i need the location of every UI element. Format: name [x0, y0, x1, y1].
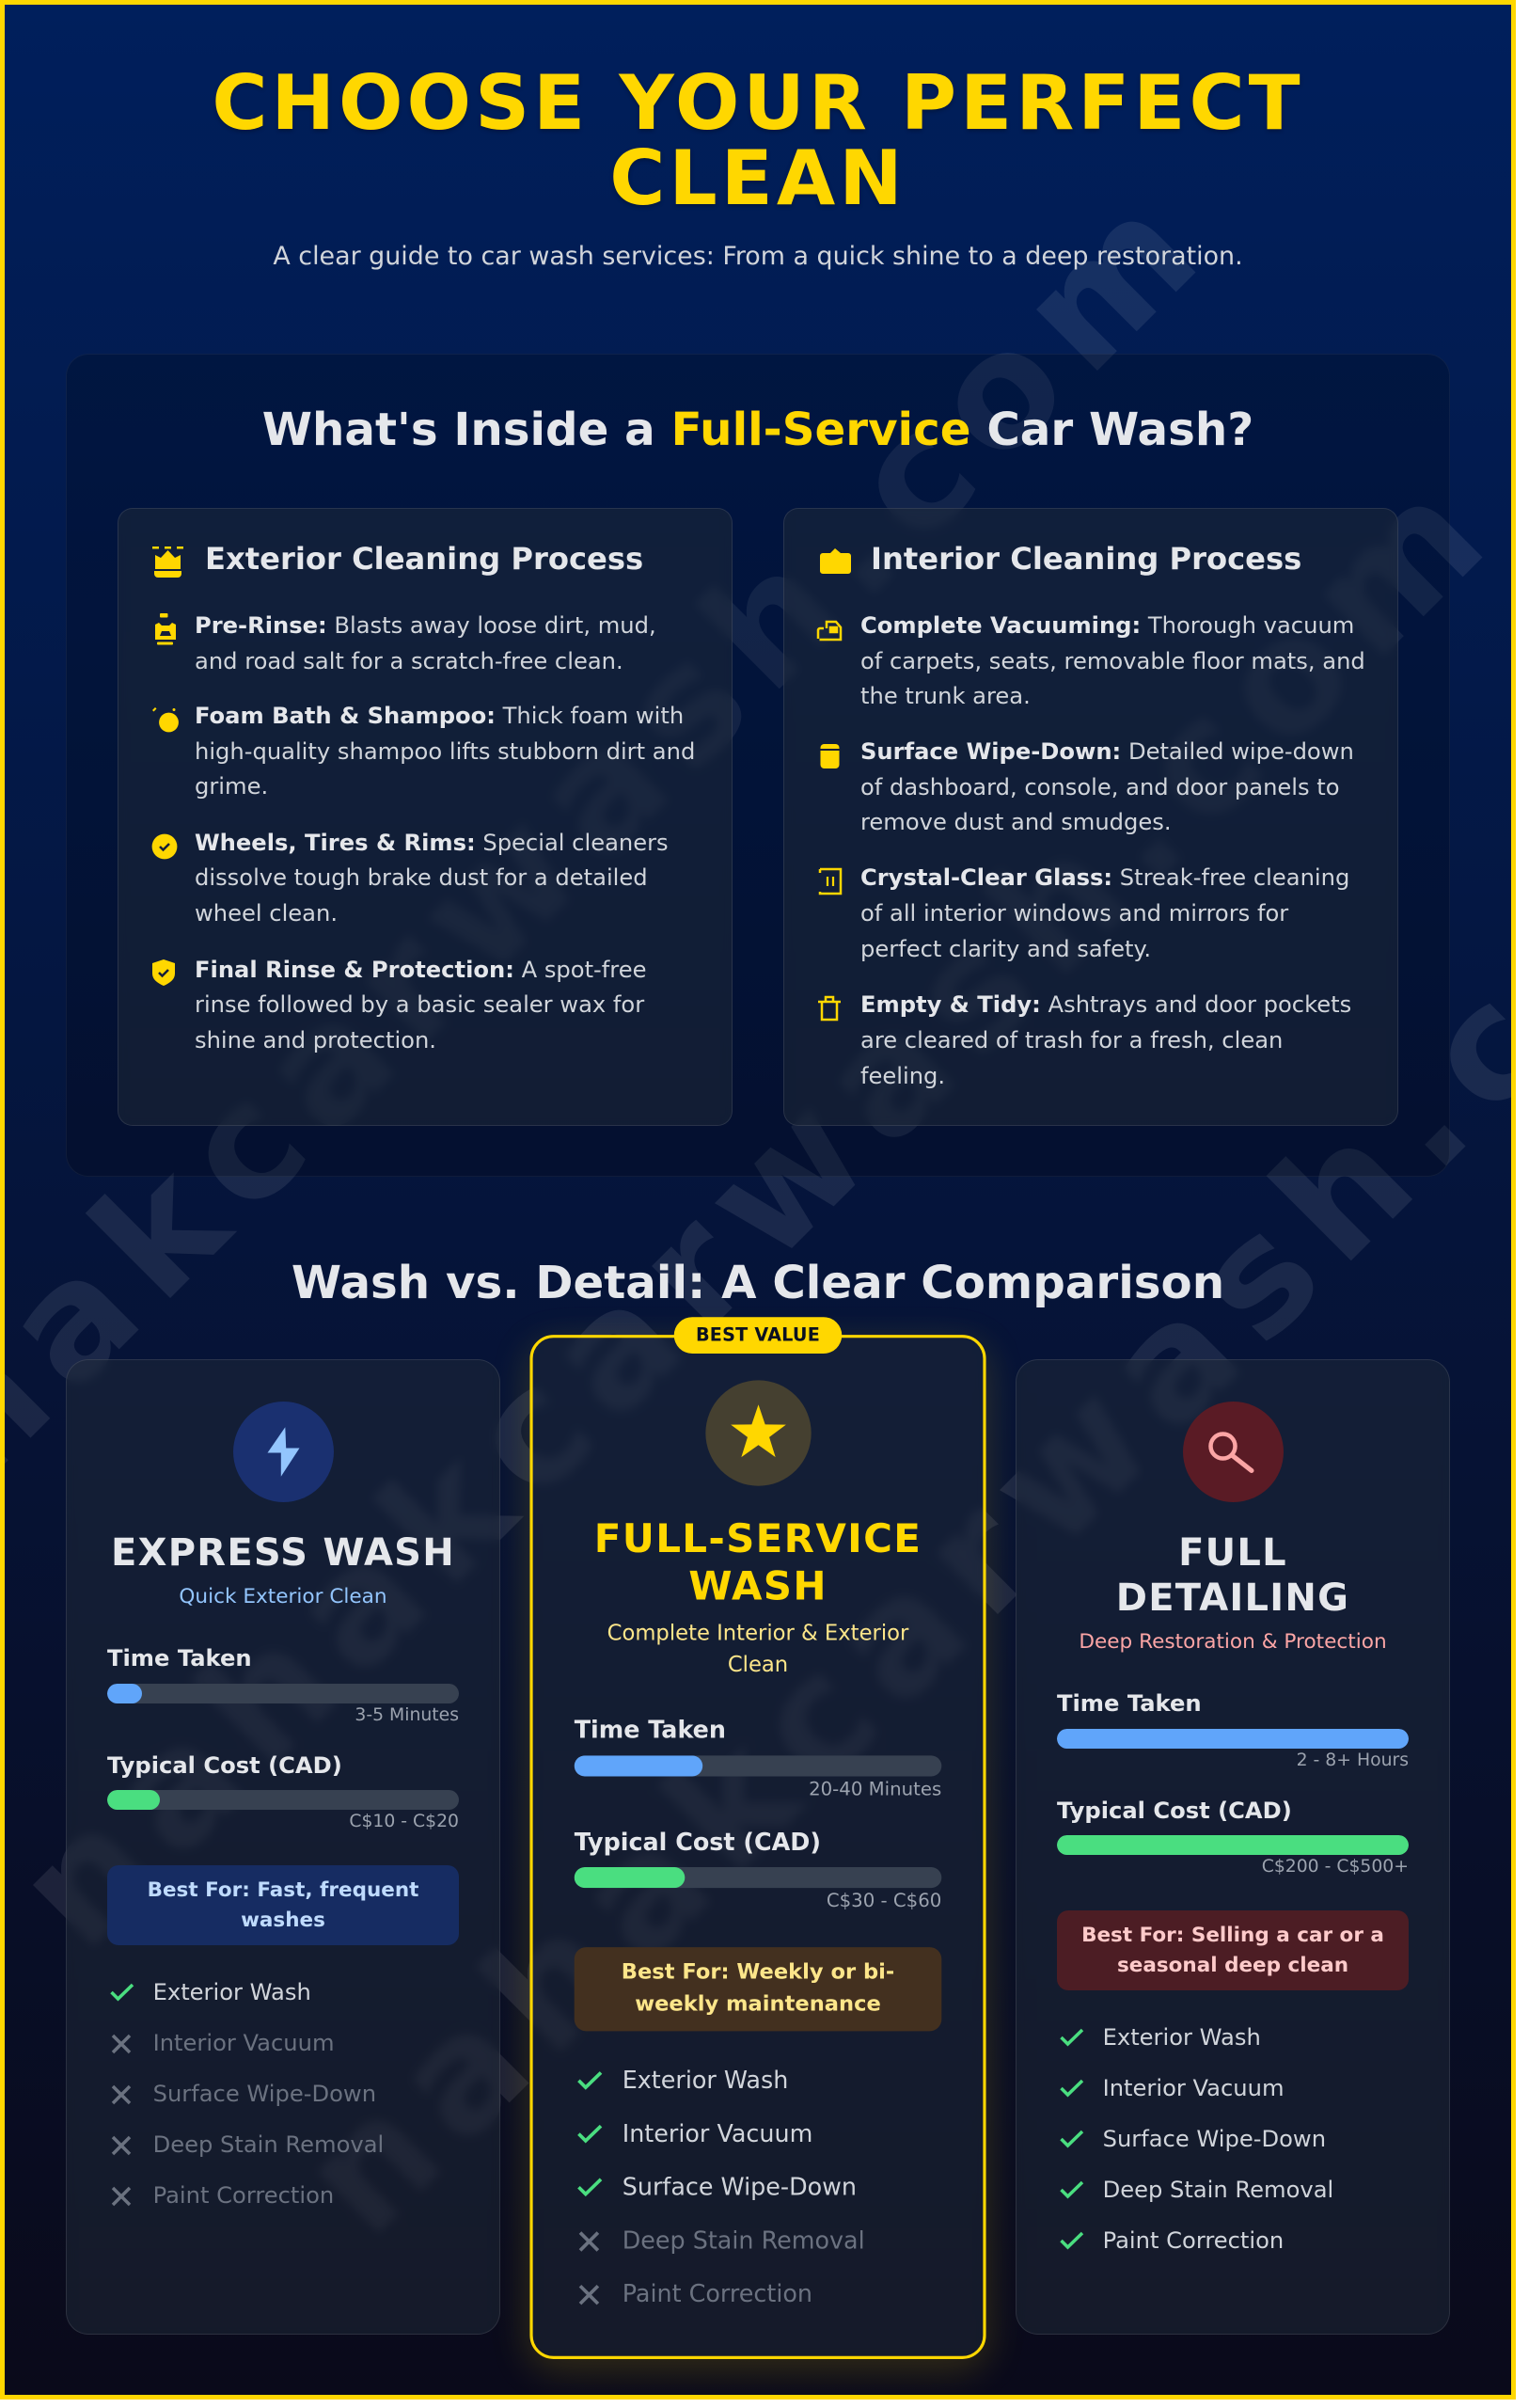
text: empty and tidy: are cleared of trash for a fresh, clean [860, 1027, 1283, 1054]
time meter: 3-5 Minutes [355, 1705, 459, 1725]
icon: foam [152, 707, 179, 732]
panel: exterior process [118, 508, 733, 1126]
card subtitle: Clean [728, 1653, 788, 1678]
subtitle: A clear guide to car wash services: From a quick shine to a deep restoration. [273, 241, 1243, 271]
text: wipe-down: remove dust and smudges. [860, 809, 1172, 835]
cost meter [107, 1752, 459, 1831]
text: foam bath [195, 703, 695, 800]
cost meter: C$10 - C$20 [349, 1812, 459, 1831]
text: pre-rinse: and road salt for a scratch-free clean. [195, 648, 623, 674]
text: foam bath: grime. [195, 773, 268, 800]
time meter: Time Taken [575, 1717, 726, 1744]
cost meter [574, 1829, 942, 1911]
card subtitle: Quick Exterior Clean [179, 1585, 387, 1608]
best value badge [674, 1317, 842, 1354]
feature list: Deep Stain Removal [153, 2131, 384, 2158]
feature list: Paint Correction [623, 2280, 812, 2308]
panel: express wash [66, 1359, 500, 2335]
card title [1116, 1531, 1349, 1620]
text: empty and tidy: feeling. [860, 1063, 945, 1089]
feature list: Exterior Wash [153, 1979, 311, 2005]
feature list: Interior Vacuum [623, 2120, 812, 2147]
text: foam bath: Foam Bath & Shampoo: Thick foam with [195, 703, 684, 729]
title: CLEAN [609, 135, 906, 223]
time meter [1057, 1690, 1409, 1770]
card subtitle [607, 1622, 908, 1678]
feature list: Deep Stain Removal [1103, 2177, 1333, 2203]
heading: exterior: Exterior Cleaning Process [205, 541, 643, 577]
feature list: Surface Wipe-Down [1103, 2126, 1326, 2152]
icon: pre-rinse [155, 613, 176, 645]
panel: full detailing [1016, 1359, 1450, 2335]
text: glass: Crystal-Clear Glass: Streak-free cleaning [860, 864, 1349, 891]
feature list [110, 1979, 384, 2209]
text: wheels: dissolve tough brake dust for a detailed [195, 864, 648, 891]
text: glass: of all interior windows and mirrors for [860, 900, 1288, 927]
time meter: Time Taken [107, 1645, 252, 1671]
best for callout [575, 1947, 941, 2031]
card title: FULL [1178, 1531, 1287, 1575]
best for callout: seasonal deep clean [1117, 1954, 1348, 1977]
time meter: 2 - 8+ Hours [1297, 1751, 1409, 1770]
text: wheels: Wheels, Tires & Rims: Special cleaners [195, 830, 669, 856]
best for callout: weekly maintenance [635, 1992, 881, 2017]
icon: glass [818, 867, 843, 895]
cost meter [1057, 1798, 1409, 1877]
icon: crown [152, 547, 183, 578]
icon: vacuum [816, 621, 843, 642]
text: vacuuming [860, 612, 1365, 709]
title [212, 59, 1304, 223]
cost meter: Typical Cost (CAD) [575, 1829, 821, 1857]
feature list: Interior Vacuum [1103, 2075, 1285, 2101]
icon: trash [818, 995, 841, 1022]
card subtitle: Deep Restoration & Protection [1079, 1630, 1387, 1654]
feature list: Surface Wipe-Down [623, 2173, 857, 2201]
text: pre-rinse [195, 612, 656, 674]
best for callout: Best For: Selling a car or a [1081, 1924, 1384, 1947]
text: wipe-down: of dashboard, console, and door panels to [860, 774, 1340, 800]
text: final rinse [195, 957, 646, 1054]
card title: FULL-SERVICE [594, 1516, 922, 1561]
time meter: 20-40 Minutes [809, 1780, 941, 1800]
feature list: Interior Vacuum [153, 2030, 335, 2056]
feature list: Paint Correction [1103, 2227, 1284, 2254]
text: final rinse: shine and protection. [195, 1027, 436, 1054]
cost meter: C$200 - C$500+ [1262, 1857, 1409, 1877]
panel: what's inside [66, 354, 1450, 1177]
title: CHOOSE YOUR PERFECT [212, 59, 1304, 148]
text: vacuuming: the trunk area. [860, 683, 1031, 709]
feature list: Exterior Wash [1103, 2024, 1261, 2051]
text: wheels: wheel clean. [195, 900, 338, 927]
cost meter: Typical Cost (CAD) [107, 1752, 342, 1779]
text: glass [860, 864, 1349, 962]
watermark: nahakcarwash.com [0, 432, 1516, 1982]
card title: WASH [688, 1563, 828, 1609]
heading: what's inside: What's Inside a Full-Service Car Wash? [262, 404, 1253, 456]
text: vacuuming: of carpets, seats, removable floor mats, and [860, 648, 1365, 674]
text: wipe-down [860, 738, 1354, 835]
icon: lightning bolt [233, 1402, 333, 1502]
icon: shield [152, 959, 175, 986]
icon: wipe [820, 744, 839, 768]
text: vacuuming: Complete Vacuuming: Thorough vacuum [860, 612, 1354, 639]
icon: star [705, 1380, 811, 1485]
best for callout: Best For: Fast, frequent [148, 1878, 418, 1902]
time meter [574, 1717, 942, 1800]
heading: comparison: Wash vs. Detail: A Clear Comparison [292, 1257, 1224, 1309]
time meter [107, 1645, 459, 1725]
heading: interior: Interior Cleaning Process [871, 541, 1301, 577]
card title: EXPRESS WASH [111, 1531, 455, 1575]
cost meter: C$30 - C$60 [827, 1891, 941, 1911]
card title [594, 1516, 922, 1609]
text: wipe-down: Surface Wipe-Down: Detailed wipe-down [860, 738, 1354, 765]
cost meter: Typical Cost (CAD) [1057, 1798, 1292, 1824]
best for callout: washes [241, 1909, 325, 1932]
best for callout [1057, 1910, 1409, 1990]
feature list: Deep Stain Removal [623, 2226, 865, 2255]
panel: full-service wash [529, 1335, 986, 2358]
best for callout [107, 1865, 459, 1945]
time meter: Time Taken [1057, 1690, 1202, 1717]
panel: interior process [783, 508, 1398, 1126]
icon: briefcase [820, 548, 851, 574]
text: glass: perfect clarity and safety. [860, 936, 1151, 962]
icon: wheel check [152, 833, 177, 860]
card title: DETAILING [1116, 1576, 1349, 1620]
feature list: Paint Correction [153, 2182, 334, 2209]
text: empty and tidy: Empty & Tidy: Ashtrays and door pockets [860, 991, 1351, 1018]
text: final rinse: rinse followed by a basic sealer wax for [195, 991, 644, 1018]
text: wheels [195, 830, 669, 927]
card subtitle: Complete Interior & Exterior [607, 1622, 908, 1646]
text: foam bath: high-quality shampoo lifts stubborn dirt and [195, 737, 695, 764]
text: final rinse: Final Rinse & Protection: A spot-free [195, 957, 646, 983]
text: empty and tidy [860, 991, 1351, 1089]
feature list [1060, 2024, 1333, 2254]
feature list: Exterior Wash [623, 2067, 788, 2094]
icon: magnifier [1183, 1402, 1283, 1502]
text: pre-rinse: Pre-Rinse: Blasts away loose dirt, mud, [195, 612, 656, 639]
feature list: Surface Wipe-Down [153, 2081, 376, 2107]
feature list [577, 2067, 865, 2308]
best for callout: Best For: Weekly or bi- [622, 1960, 894, 1985]
best value badge: BEST VALUE [696, 1324, 820, 1345]
